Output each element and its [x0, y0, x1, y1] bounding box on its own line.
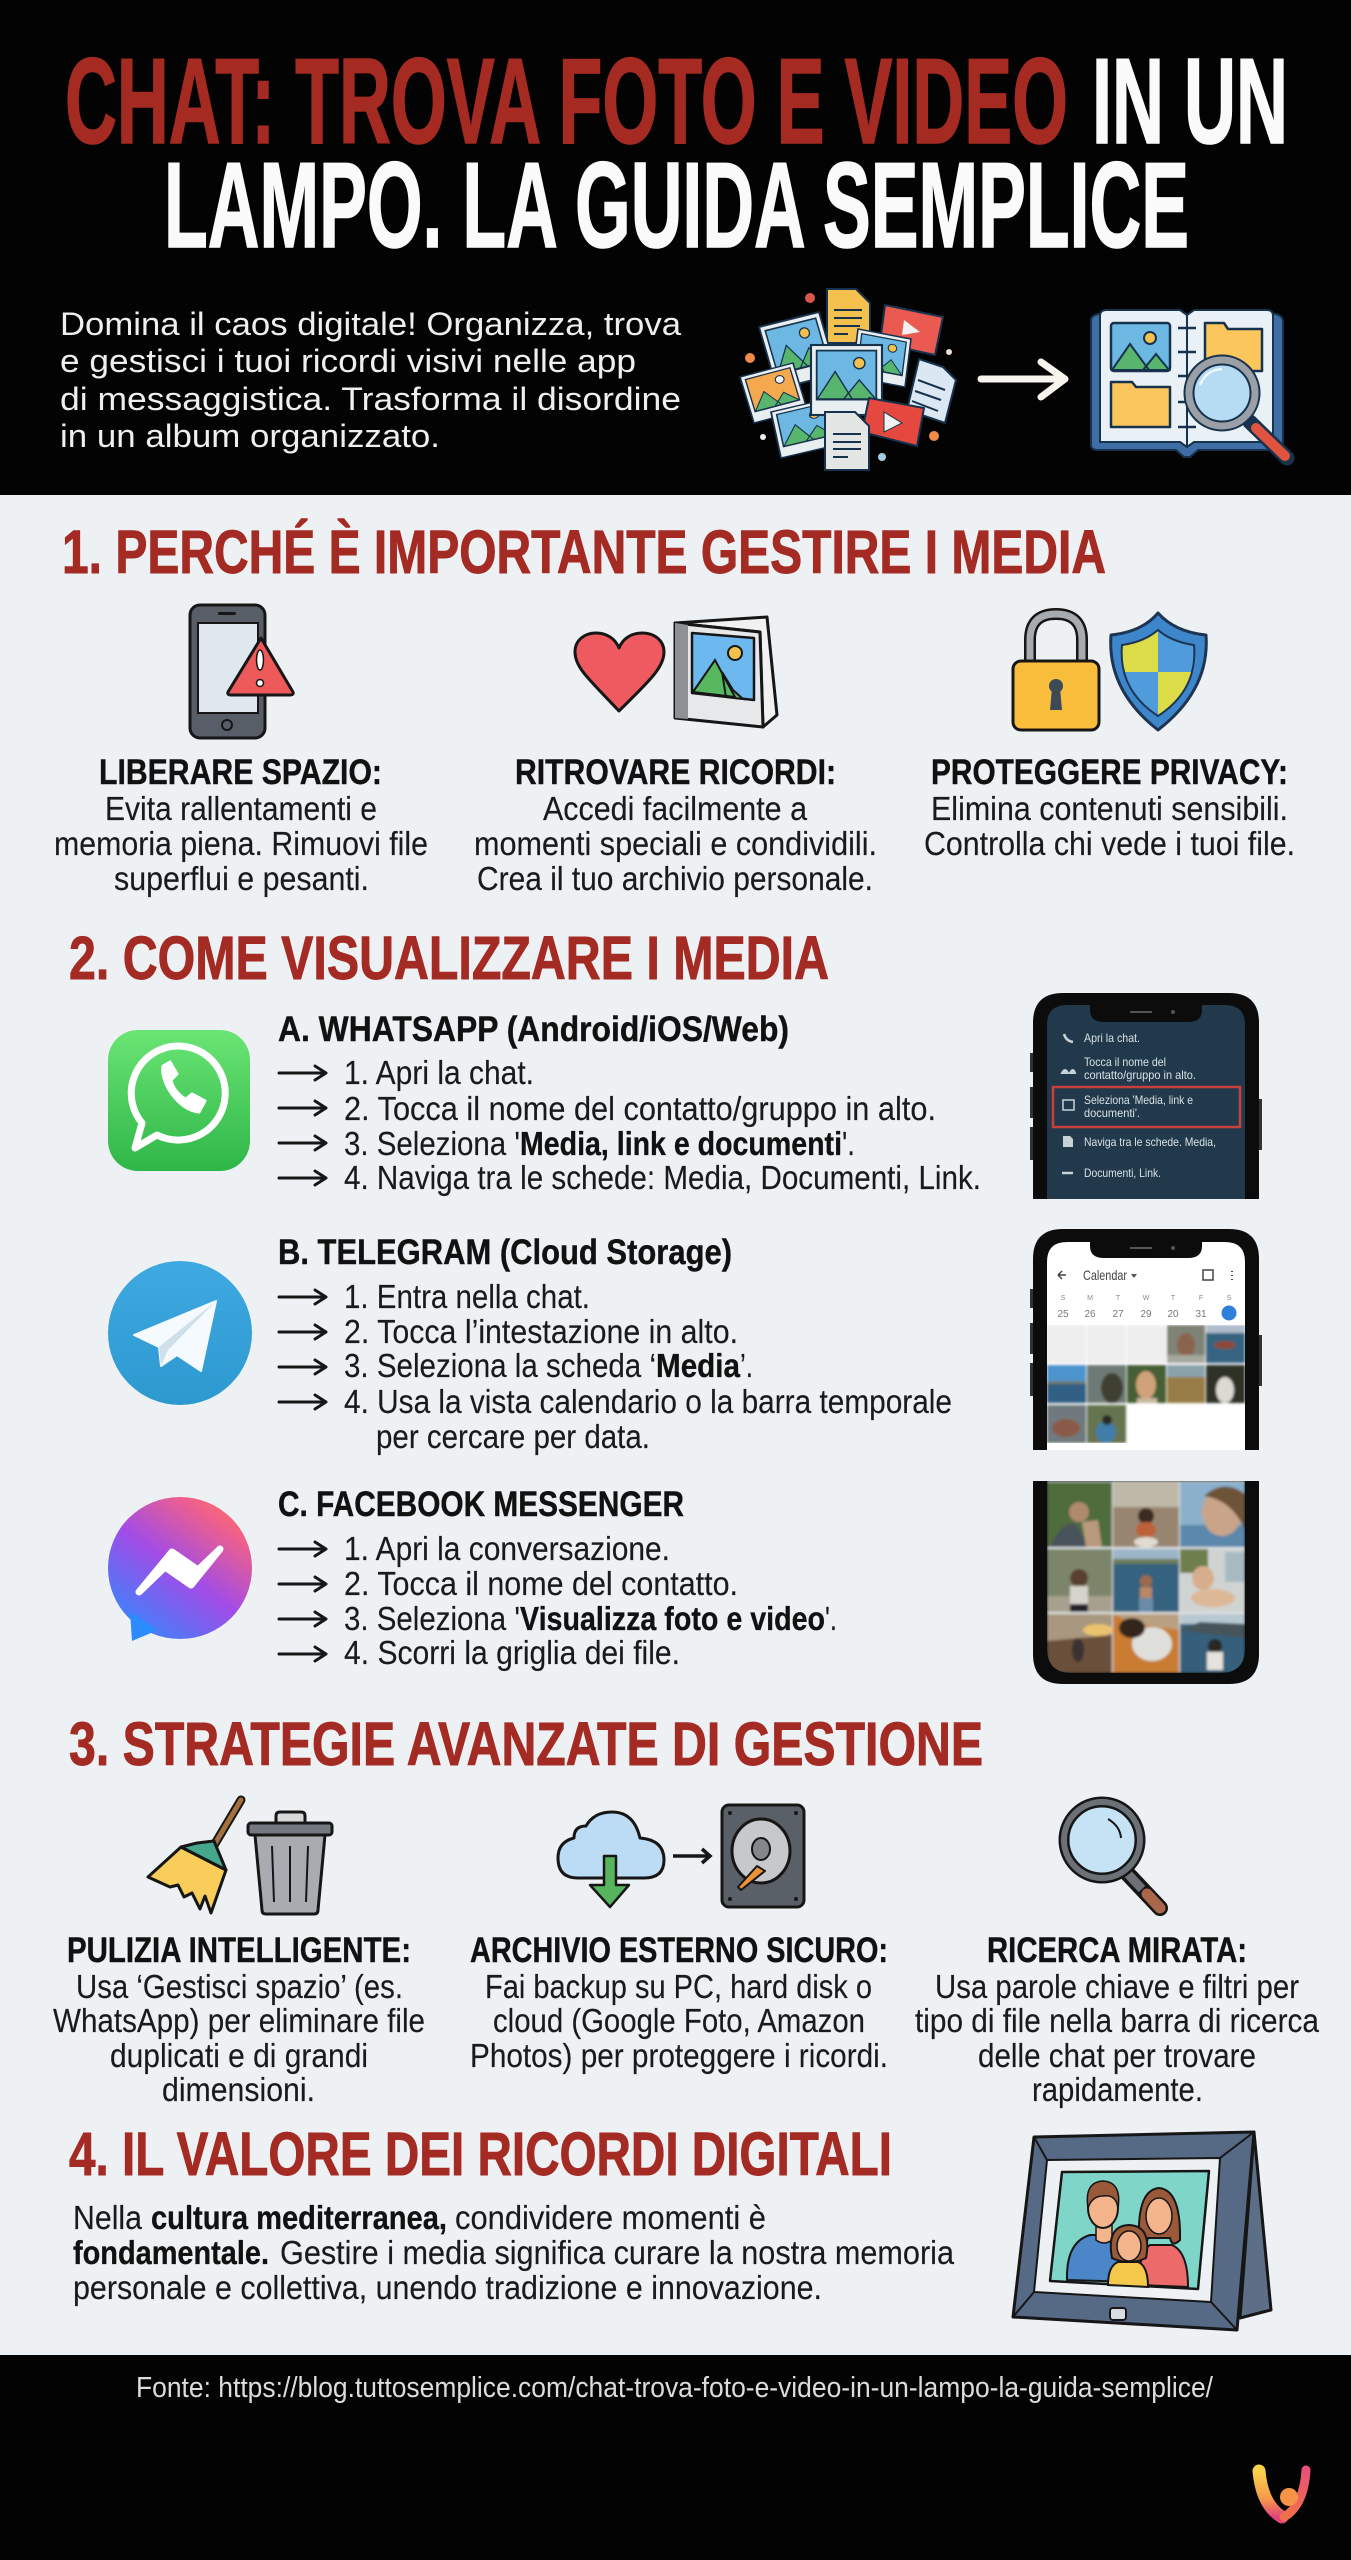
icon: organized album with magnifier	[1091, 310, 1287, 458]
phone mockup: whatsapp menu: Seleziona 'Media, link e	[1084, 1093, 1193, 1107]
column: pulizia intelligente: WhatsApp) per eliminare file	[53, 2002, 425, 2039]
icon: padlock and shield	[1013, 613, 1206, 730]
column: ricerca mirata	[915, 1931, 1320, 2108]
column: proteggere privacy: PROTEGGERE PRIVACY:	[931, 753, 1288, 792]
column: ricerca mirata: delle chat per trovare	[978, 2037, 1256, 2074]
paragraph	[73, 2199, 955, 2306]
phone mockup: telegram calendar: S	[1061, 1295, 1066, 1302]
column: archivio esterno sicuro: ARCHIVIO ESTERNO SICURO:	[470, 1931, 888, 1970]
icon: cloud to hard disk	[558, 1805, 804, 1907]
app block: telegram steps: ’.	[740, 1347, 753, 1384]
app block: messenger steps: 4. Scorri la griglia dei file.	[344, 1634, 680, 1671]
column: pulizia intelligente: PULIZIA INTELLIGENTE:	[67, 1931, 411, 1970]
heading 4: 4. IL VALORE DEI RICORDI DIGITALI	[69, 2120, 892, 2188]
column: liberare spazio: Evita rallentamenti e	[105, 790, 377, 827]
source line: Fonte: https://blog.tuttosemplice.com/chat-trova-foto-e-video-in-un-lampo-la-guida-semplice/	[136, 2372, 1214, 2404]
column: pulizia intelligente: Usa ‘Gestisci spazio’ (es.	[76, 1968, 403, 2005]
app block: whatsapp steps: 1. Apri la chat.	[344, 1054, 534, 1091]
phone mockup: telegram calendar	[1030, 1229, 1262, 1450]
phone mockup: whatsapp menu: Apri la chat.	[1084, 1031, 1140, 1045]
heading 2: 2. COME VISUALIZZARE I MEDIA	[69, 924, 829, 992]
column: liberare spazio: superflui e pesanti.	[114, 860, 369, 897]
paragraph: fondamentale.	[73, 2234, 269, 2271]
paragraph: personale e collettiva, unendo tradizione e innovazione.	[73, 2269, 822, 2306]
phone mockup: whatsapp menu: Documenti, Link.	[1084, 1166, 1161, 1180]
phone mockup: telegram calendar: 27	[1112, 1309, 1124, 1320]
heading 3: 3. STRATEGIE AVANZATE DI GESTIONE	[69, 1710, 983, 1778]
column: proteggere privacy: Elimina contenuti sensibili.	[931, 790, 1288, 827]
column: liberare spazio	[54, 753, 428, 897]
app block: messenger steps: 3. Seleziona '	[344, 1600, 520, 1637]
column: ritrovare ricordi: RITROVARE RICORDI:	[515, 753, 836, 792]
column: ricerca mirata: rapidamente.	[1032, 2071, 1203, 2108]
icon: magnifying glass	[1064, 1802, 1160, 1908]
panel: footer	[0, 2355, 1351, 2560]
icon: facebook messenger	[108, 1497, 252, 1641]
icon: digital photo frame with family	[1013, 2132, 1271, 2330]
phone mockup: telegram calendar: 20	[1167, 1309, 1179, 1320]
column: pulizia intelligente: duplicati e di grandi	[110, 2037, 368, 2074]
phone mockup: whatsapp menu: documenti'.	[1084, 1106, 1140, 1120]
app block: telegram steps: 3. Seleziona la scheda ‘	[344, 1347, 656, 1384]
phone mockup: telegram calendar: 29	[1140, 1309, 1152, 1320]
intro text: in un album organizzato.	[60, 418, 440, 454]
app block: telegram steps: 1. Entra nella chat.	[344, 1278, 590, 1315]
icon: broom and trash can	[148, 1800, 332, 1914]
column: proteggere privacy: Controlla chi vede i tuoi file.	[924, 825, 1295, 862]
column: proteggere privacy	[924, 753, 1295, 862]
icon: messy pile of media	[740, 289, 956, 470]
icon: whatsapp	[108, 1030, 250, 1171]
app block: telegram steps: B. TELEGRAM (Cloud Storage)	[278, 1233, 732, 1272]
title	[65, 33, 1288, 273]
column: ricerca mirata: RICERCA MIRATA:	[987, 1931, 1247, 1970]
app block: messenger steps: 2. Tocca il nome del contatto.	[344, 1565, 738, 1602]
phone mockup: whatsapp menu: contatto/gruppo in alto.	[1084, 1068, 1196, 1082]
column: liberare spazio: memoria piena. Rimuovi file	[54, 825, 428, 862]
phone mockup: telegram calendar: S	[1227, 1295, 1232, 1302]
column: pulizia intelligente	[53, 1931, 425, 2108]
app block: whatsapp steps: Media, link e documenti	[520, 1125, 842, 1162]
column: archivio esterno sicuro: Fai backup su PC, hard disk o	[485, 1968, 872, 2005]
heading 1: 1. PERCHÉ È IMPORTANTE GESTIRE I MEDIA	[62, 518, 1106, 586]
column: ritrovare ricordi	[474, 753, 877, 897]
column: archivio esterno sicuro	[470, 1931, 888, 2074]
phone mockup: telegram calendar: T	[1116, 1295, 1121, 1302]
app block: messenger steps: Visualizza foto e video	[520, 1600, 825, 1637]
panel: header	[0, 0, 1351, 495]
section 4: value of digital memories	[69, 2120, 1271, 2330]
app block: whatsapp steps: '.	[842, 1125, 855, 1162]
section 1: why it matters	[54, 518, 1295, 897]
intro text	[60, 306, 681, 454]
logo	[1259, 2470, 1306, 2517]
app block: telegram steps	[278, 1233, 952, 1455]
icon: phone with warning	[190, 605, 293, 738]
intro text: di messaggistica. Trasforma il disordine	[60, 381, 681, 417]
phone mockup: whatsapp menu: Tocca il nome del	[1084, 1055, 1166, 1069]
app block: telegram steps: 4. Usa la vista calendario o la barra temporale	[344, 1383, 952, 1420]
column: ritrovare ricordi: momenti speciali e condividili.	[474, 825, 877, 862]
paragraph: Nella	[73, 2199, 143, 2236]
paragraph: cultura mediterranea,	[151, 2199, 447, 2236]
app block: whatsapp steps: 3. Seleziona '	[344, 1125, 520, 1162]
phone mockup: telegram calendar: Calendar	[1083, 1267, 1127, 1283]
phone mockup: whatsapp menu: Naviga tra le schede. Media,	[1084, 1135, 1216, 1149]
intro text: Domina il caos digitale! Organizza, trova	[60, 306, 681, 342]
icon: telegram	[108, 1261, 252, 1405]
app block: whatsapp steps: 4. Naviga tra le schede: Media, Documenti, Link.	[344, 1159, 981, 1196]
column: archivio esterno sicuro: Photos) per proteggere i ricordi.	[470, 2037, 888, 2074]
paragraph: Gestire i media significa curare la nostra memoria	[280, 2234, 955, 2271]
phone mockup: telegram calendar: F	[1199, 1295, 1203, 1302]
phone mockup: telegram calendar: 26	[1084, 1309, 1096, 1320]
arrow: chaos to order	[981, 362, 1065, 397]
app block: whatsapp steps: A. WHATSAPP (Android/iOS/Web)	[278, 1010, 789, 1049]
app block: messenger steps: 1. Apri la conversazione.	[344, 1530, 670, 1567]
column: pulizia intelligente: dimensioni.	[162, 2071, 315, 2108]
app block: whatsapp steps: 2. Tocca il nome del contatto/gruppo in alto.	[344, 1090, 936, 1127]
app block: telegram steps: 2. Tocca l’intestazione in alto.	[344, 1313, 738, 1350]
app block: telegram steps: per cercare per data.	[376, 1418, 650, 1455]
app block: messenger steps: C. FACEBOOK MESSENGER	[278, 1485, 684, 1524]
phone mockup: whatsapp menu	[1030, 993, 1262, 1199]
phone mockup: messenger photo grid	[1033, 1481, 1259, 1684]
phone mockup: telegram calendar: 31	[1195, 1309, 1207, 1320]
app block: whatsapp steps	[278, 1010, 981, 1196]
phone mockup: telegram calendar: W	[1143, 1295, 1150, 1302]
app block: messenger steps: '.	[825, 1600, 837, 1637]
section 3: advanced strategies	[53, 1710, 1320, 2108]
column: liberare spazio: LIBERARE SPAZIO:	[99, 753, 382, 792]
app block: messenger steps	[278, 1485, 837, 1671]
column: ricerca mirata: tipo di file nella barra di ricerca	[915, 2002, 1320, 2039]
phone mockup: telegram calendar: M	[1087, 1295, 1093, 1302]
column: archivio esterno sicuro: cloud (Google Foto, Amazon	[493, 2002, 865, 2039]
column: ricerca mirata: Usa parole chiave e filtri per	[935, 1968, 1299, 2005]
app block: telegram steps: Media	[656, 1347, 741, 1384]
section 2: how to view media	[69, 924, 1262, 1684]
phone mockup: telegram calendar: 25	[1057, 1309, 1069, 1320]
paragraph: condividere momenti è	[455, 2199, 766, 2236]
intro text: e gestisci i tuoi ricordi visivi nelle app	[60, 343, 636, 379]
column: ritrovare ricordi: Accedi facilmente a	[543, 790, 808, 827]
icon: heart and photo album	[575, 617, 777, 727]
column: ritrovare ricordi: Crea il tuo archivio personale.	[477, 860, 873, 897]
phone mockup: telegram calendar: T	[1171, 1295, 1176, 1302]
